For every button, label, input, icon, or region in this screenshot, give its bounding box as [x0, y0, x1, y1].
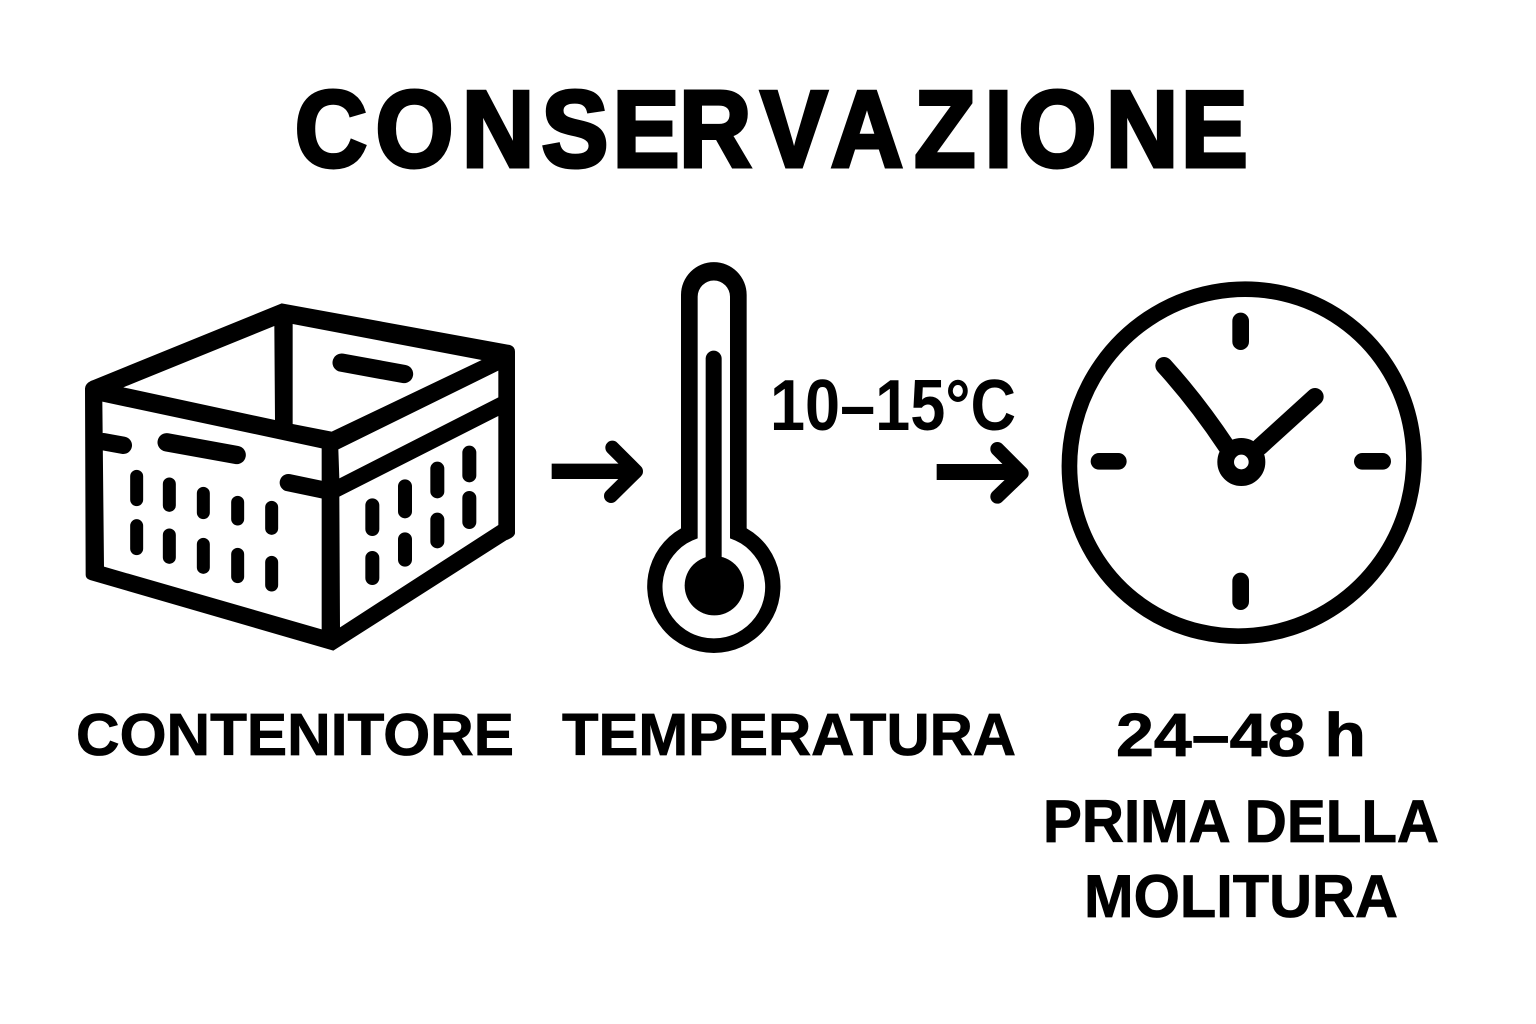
arrow: crate to thermometer	[552, 448, 636, 496]
icon: thermometer	[647, 262, 780, 653]
label: container: CONTENITORE	[76, 702, 514, 768]
thermometer outline	[647, 262, 780, 653]
mercury bulb	[685, 556, 744, 615]
label: duration: 24–48 h	[1116, 701, 1366, 769]
mercury column	[690, 359, 738, 567]
label: before milling: PRIMA DELLA	[1043, 788, 1439, 855]
label: before milling	[1043, 788, 1439, 930]
label: before milling: MOLITURA	[1084, 863, 1398, 930]
arrow: thermometer to clock	[937, 449, 1022, 497]
hour ticks	[1099, 321, 1383, 602]
crate silhouette	[85, 303, 515, 651]
icon: ventilated crate	[85, 303, 515, 651]
label: temperature: TEMPERATURA	[562, 702, 1016, 768]
front slots	[137, 476, 272, 585]
title: CONSERVAZIONE	[295, 69, 1248, 190]
icon: clock	[1001, 222, 1482, 704]
clock face	[1001, 222, 1482, 704]
clock hub	[1226, 446, 1257, 478]
crate openings	[102, 324, 498, 629]
clock hands	[1164, 366, 1315, 447]
handles	[103, 363, 404, 491]
side slots	[372, 453, 469, 578]
temperature value: 10–15°C	[770, 366, 1016, 446]
